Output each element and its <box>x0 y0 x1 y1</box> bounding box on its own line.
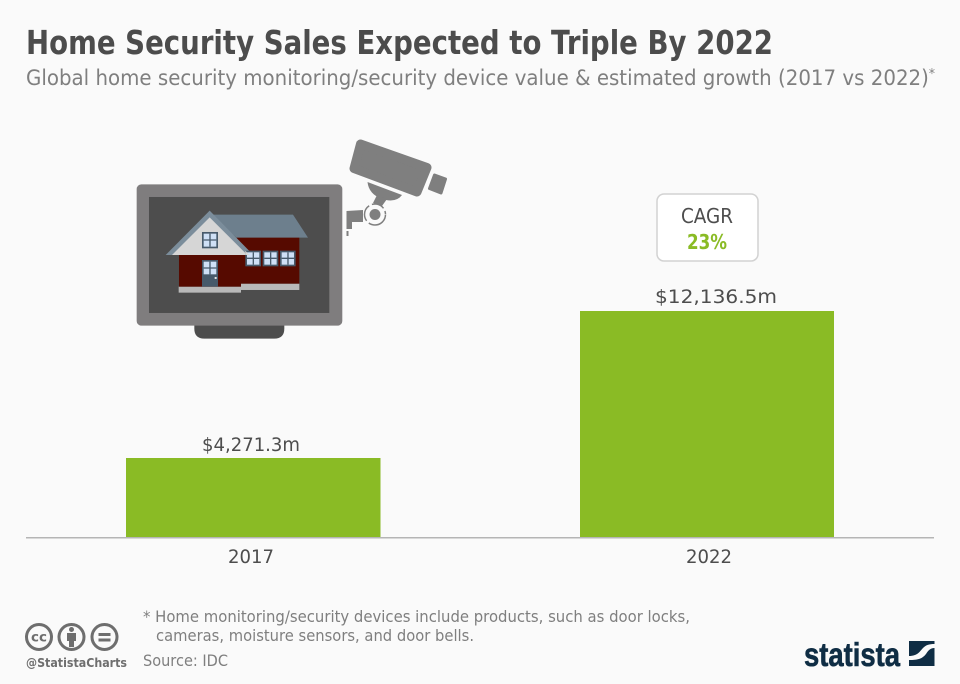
handle: @StatistaCharts <box>26 656 127 670</box>
bar 2017 <box>126 458 380 537</box>
callout: CAGR <box>657 194 758 261</box>
monitor screen <box>149 197 329 313</box>
monitor stand <box>194 325 284 339</box>
house <box>166 211 308 293</box>
callout: CAGR: CAGR <box>681 204 733 228</box>
axis label 2022: 2022 <box>686 546 732 568</box>
axis line <box>26 537 934 538</box>
bar 2022 <box>580 311 834 537</box>
axis label 2017: 2017 <box>228 546 274 568</box>
callout: CAGR: 23% <box>687 230 727 254</box>
logo: statista: statista <box>804 636 901 673</box>
title: Home Security Sales Expected to Triple By 2022 <box>26 23 773 62</box>
subtitle: Global home security monitoring/security device value & estimated growth (2017 vs 2022) <box>26 66 960 90</box>
footnote: cameras, moisture sensors, and door bells. <box>156 626 474 645</box>
icon: security camera <box>346 144 446 236</box>
icon: monitor showing house <box>137 184 342 339</box>
source: Source: IDC <box>143 651 228 670</box>
footnote <box>143 607 690 645</box>
value label 2017: $4,271.3m <box>202 434 300 456</box>
icon: creative commons licence badges: cc <box>31 630 47 646</box>
footnote: * Home monitoring/security devices include products, such as door locks, <box>143 607 690 626</box>
subtitle: * <box>929 67 935 82</box>
value label 2022: $12,136.5m <box>655 286 777 308</box>
icon: creative commons licence badges <box>26 624 117 650</box>
monitor frame <box>137 184 342 326</box>
